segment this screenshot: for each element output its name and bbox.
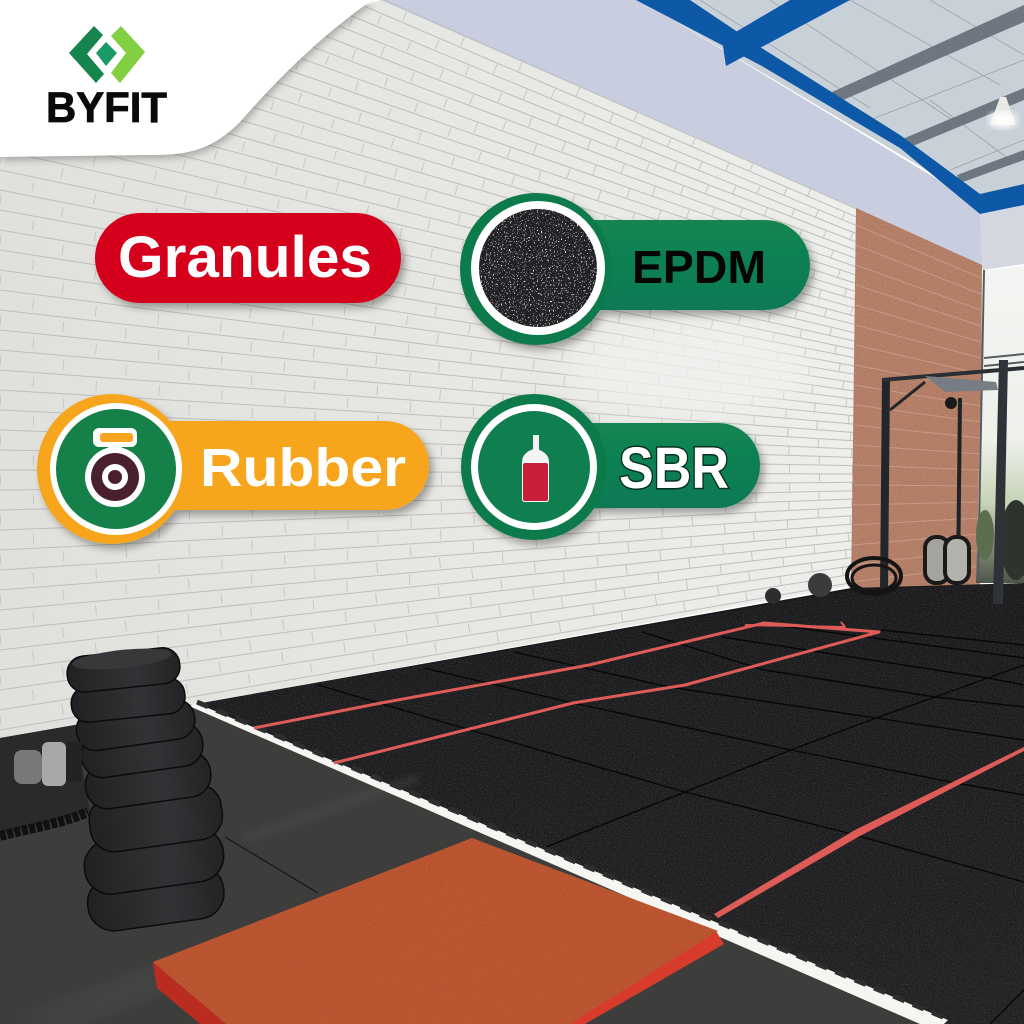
grey floor bbox=[0, 705, 935, 1024]
label: EPDM bbox=[460, 193, 810, 345]
label: EPDM: EPDM bbox=[632, 241, 766, 293]
window bbox=[976, 266, 1024, 583]
ceiling with panels bbox=[640, 0, 1024, 205]
red floor lines bbox=[254, 622, 1024, 918]
white brick wall bbox=[0, 0, 860, 738]
icon: wheels bbox=[925, 537, 969, 583]
battle rope bbox=[0, 812, 88, 836]
label: Rubber bbox=[37, 394, 429, 544]
black rubber floor bbox=[190, 583, 1024, 1024]
icon: weight plate bbox=[85, 428, 145, 507]
background: lavender upper wall bbox=[380, 0, 985, 268]
icon: coiled ropes bbox=[847, 558, 901, 594]
white interlocking border strip bbox=[189, 702, 950, 1024]
icon: BYFIT diamond logo bbox=[69, 26, 145, 83]
logo wordmark: BYFIT bbox=[46, 84, 167, 132]
blue steel beams bbox=[636, 0, 1024, 214]
label: SBR bbox=[461, 394, 760, 540]
icon: red bottle bbox=[522, 435, 549, 502]
dumbbell bbox=[14, 742, 82, 786]
label: Granules bbox=[95, 213, 401, 303]
right wall above window bbox=[980, 205, 1024, 270]
orange rubber mat bbox=[150, 835, 725, 1024]
label: Rubber: Rubber bbox=[200, 438, 406, 498]
icon: medicine ball small bbox=[765, 588, 781, 604]
gym rig and equipment bbox=[765, 360, 1024, 604]
icon: EPDM granule texture bbox=[479, 209, 597, 327]
icon: medicine ball large bbox=[808, 573, 832, 597]
logo panel bbox=[0, 0, 374, 160]
exposed red brick wall bbox=[850, 205, 985, 590]
icon: ceiling lamp bbox=[989, 97, 1017, 128]
label: SBR: SBR bbox=[619, 436, 729, 501]
label: Granules: Granules bbox=[118, 225, 372, 290]
stack of rubber weight plates bbox=[65, 645, 227, 934]
